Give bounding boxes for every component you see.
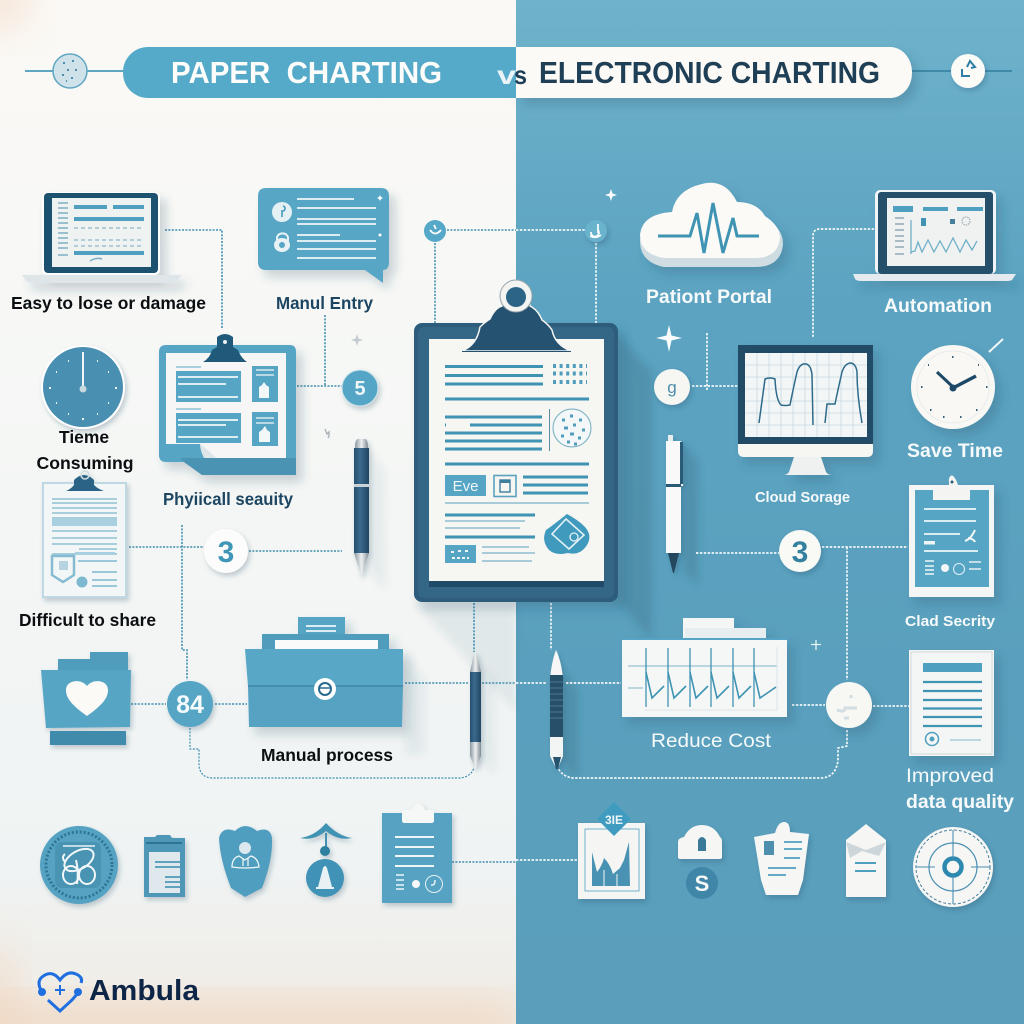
title banner: [25, 47, 1012, 98]
clipboard clip: [462, 280, 571, 352]
bottom icon: caduceus: [300, 823, 352, 897]
number badge: 3 right: 3: [792, 536, 808, 569]
bottom icon: envelope: [846, 824, 886, 897]
label: physical security: Phyiicall seauity: [163, 489, 293, 509]
icon: left header medallion: [53, 54, 87, 88]
number badge: 84: 84: [176, 691, 204, 719]
number badge: 3 left: [204, 529, 248, 573]
clipboard: difficult to share: [42, 471, 127, 598]
icon: faint sparkle: [351, 334, 363, 346]
long diagonal shadows: [369, 335, 698, 780]
label: manual process: Manual process: [261, 745, 393, 765]
icon: briefcase: [245, 617, 403, 727]
label: difficult to share: Difficult to share: [19, 610, 156, 630]
bottom icon: form document: [144, 835, 185, 897]
blue seal: [544, 514, 589, 554]
icon: right header medallion: [951, 54, 985, 88]
icon: heart folder: [41, 652, 131, 745]
label: cloud storage: Cloud Sorage: [755, 489, 850, 506]
pen: white electronic: [666, 435, 683, 573]
icon: right clock: [911, 345, 995, 429]
icon: small faint glyph: [325, 429, 329, 438]
connector lines: paper side: [129, 230, 516, 862]
number badge: 3 left: 3: [218, 536, 234, 569]
number badge: 3 right: [779, 530, 821, 572]
number badge: g: g: [667, 378, 677, 397]
small document box: [494, 476, 516, 496]
specimen circle: [553, 409, 591, 447]
small data box: [445, 545, 476, 563]
logo wordmark: Ambula: [89, 975, 200, 1007]
icon: sparkle: [605, 189, 617, 201]
label: time consuming: Tieme: [59, 427, 109, 447]
pen: small teal electronic: [550, 650, 563, 769]
label: time consuming: [36, 427, 134, 473]
label: time consuming: Consuming: [36, 453, 134, 473]
bottom icon: chart frame: 3IE: [605, 813, 623, 827]
main clipboard: [414, 280, 618, 602]
bottom icon: lock and dollar: [678, 825, 722, 899]
icon: left clock: [41, 345, 125, 429]
label: cloud security: Clad Secrity: [905, 613, 996, 630]
icon: connector node left: [424, 220, 446, 242]
bottom icon: teal clipboard: [382, 804, 452, 903]
label: improved data quality: [906, 765, 1014, 813]
background: electronic side: [516, 0, 1024, 1024]
laptop: easy to lose or damage: [22, 192, 182, 283]
label: easy to lose or damage: Easy to lose or damage: [11, 293, 206, 313]
bottom icon: lock and dollar: S: [695, 871, 709, 896]
document: improved data quality: [909, 650, 994, 756]
cloud: patient portal: [640, 183, 783, 267]
icon: connector node right: [585, 220, 607, 242]
label: improved data quality: data quality: [906, 791, 1014, 813]
logo heart mark: [38, 973, 82, 1011]
eve tag: [445, 475, 486, 496]
eve tag: Eve: [453, 478, 478, 495]
label: save time: Save Time: [907, 440, 1003, 462]
logo: Ambula: [38, 973, 200, 1011]
icon: small plus sparkle: [811, 640, 821, 650]
speech bubble: manual entry: [258, 188, 389, 283]
number badge: 5: 5: [354, 378, 366, 400]
heading: vs: v: [497, 60, 517, 90]
label: improved data quality: Improved: [906, 765, 994, 787]
connector node: blank badge: [826, 682, 872, 728]
pen: navy large: [354, 439, 369, 575]
icon: white sparkle: [656, 325, 682, 352]
laptop: automation: [853, 190, 1016, 281]
number badge: g: [654, 369, 690, 405]
number badge: 84: [167, 681, 213, 727]
bottom icon: doctor shield: [219, 826, 272, 897]
clipboard: cloud security: [909, 476, 994, 597]
label: patient portal: Pationt Portal: [646, 286, 772, 308]
bottom icon: pills badge: [40, 826, 118, 904]
heading: paper charting: PAPER CHARTING: [171, 55, 442, 90]
bottom icon: chart frame: [578, 802, 645, 899]
document lines: [445, 366, 589, 561]
bottom icon: patient paper: [754, 822, 809, 895]
folder ECG: reduce cost: [622, 618, 787, 717]
icon: clock tick mark: [989, 339, 1003, 352]
bottom icon: target dial: [913, 827, 993, 907]
heading: vs: s: [514, 60, 527, 90]
label: automation: Automation: [884, 296, 992, 317]
heading: vs: [497, 60, 527, 90]
clipboard: physical security: [159, 334, 296, 475]
number badge: 5: [342, 370, 378, 406]
heading: electronic charting: ELECTRONIC CHARTING: [539, 55, 880, 90]
pen: small navy: [470, 653, 481, 768]
label: reduce cost: Reduce Cost: [651, 730, 772, 752]
connector lines: electronic side: [516, 229, 910, 860]
background: paper side: [0, 0, 517, 1024]
monitor: cloud storage: [738, 345, 873, 475]
label: manual entry: Manul Entry: [276, 293, 373, 313]
